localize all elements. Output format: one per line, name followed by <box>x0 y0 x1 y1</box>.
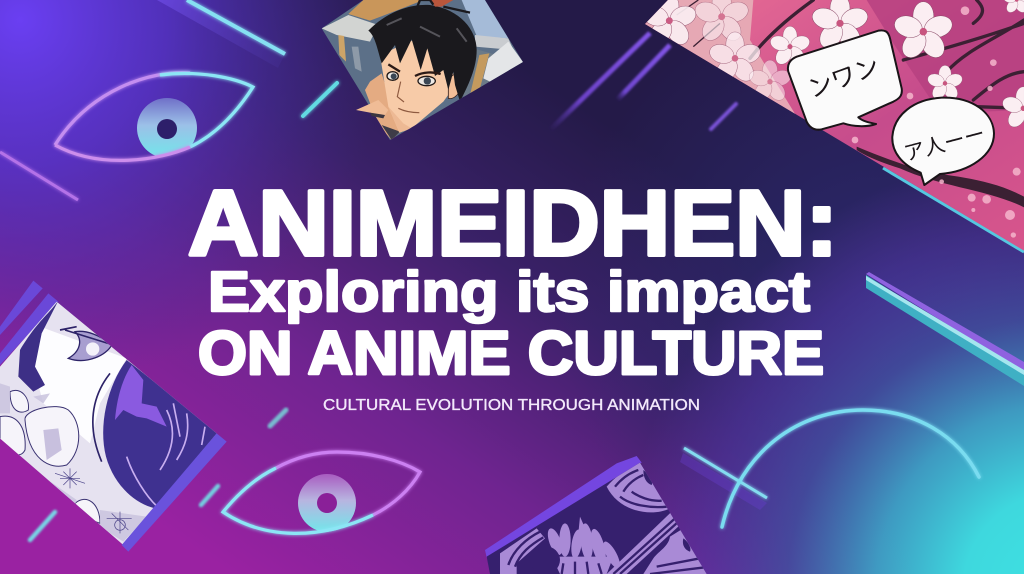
chrysanthemum petals <box>548 528 562 555</box>
icon: upper neon eye <box>55 73 253 160</box>
neon streaks: violet pair <box>550 33 670 130</box>
portrait panel: anime man <box>320 0 533 143</box>
blossoms <box>646 0 696 45</box>
branches <box>750 0 1024 108</box>
3D bar: right <box>866 272 1024 386</box>
neon line: left violet <box>0 152 78 200</box>
subtitle: CULTURAL EVOLUTION THROUGH ANIMATION <box>323 397 700 414</box>
panel: cherry blossom manga illustration <box>640 0 1024 260</box>
neon dash: bottom left <box>30 512 55 540</box>
hand pointing out of panel <box>356 100 388 117</box>
lower right shape <box>643 528 710 574</box>
icon: lower neon eye <box>223 452 420 533</box>
neon arc with cross line <box>680 410 979 527</box>
face <box>380 40 457 133</box>
speech bubble 2: ア人ーー <box>902 122 988 166</box>
petal specks <box>852 6 1021 238</box>
nose and mouth <box>397 82 419 113</box>
title line 1: ANIMEIDHEN: <box>188 171 838 275</box>
left swirl <box>500 528 545 574</box>
neon bar: top left with shadow band <box>157 0 285 68</box>
white face <box>33 327 127 443</box>
dark hair fringe <box>18 301 58 392</box>
title line 2: Exploring its impact <box>208 260 810 324</box>
arm and chest <box>365 73 400 140</box>
neon dash: beside lower eye <box>201 486 218 505</box>
brows and eyes <box>388 64 441 76</box>
panel: bottom dark floral manga <box>485 456 706 574</box>
panel: left manga portrait <box>0 280 226 552</box>
top arcs <box>607 463 670 512</box>
ear <box>448 74 458 99</box>
diagonal band <box>607 512 680 574</box>
title block <box>188 171 838 414</box>
eye <box>68 331 112 360</box>
speech bubble 2 <box>892 98 994 185</box>
speech bubble 1 <box>788 30 902 130</box>
neon dash: above lower eye <box>270 410 286 426</box>
teal edge of sakura panel <box>883 168 1024 252</box>
long hair <box>103 360 220 508</box>
neon dash: teal near portrait <box>303 83 337 116</box>
speech bubble 1: ンワン <box>805 53 883 104</box>
title line 3: ON ANIME CULTURE <box>198 319 824 387</box>
hair <box>368 5 477 102</box>
floral dress <box>0 390 100 523</box>
neon dash: small violet <box>711 104 736 129</box>
